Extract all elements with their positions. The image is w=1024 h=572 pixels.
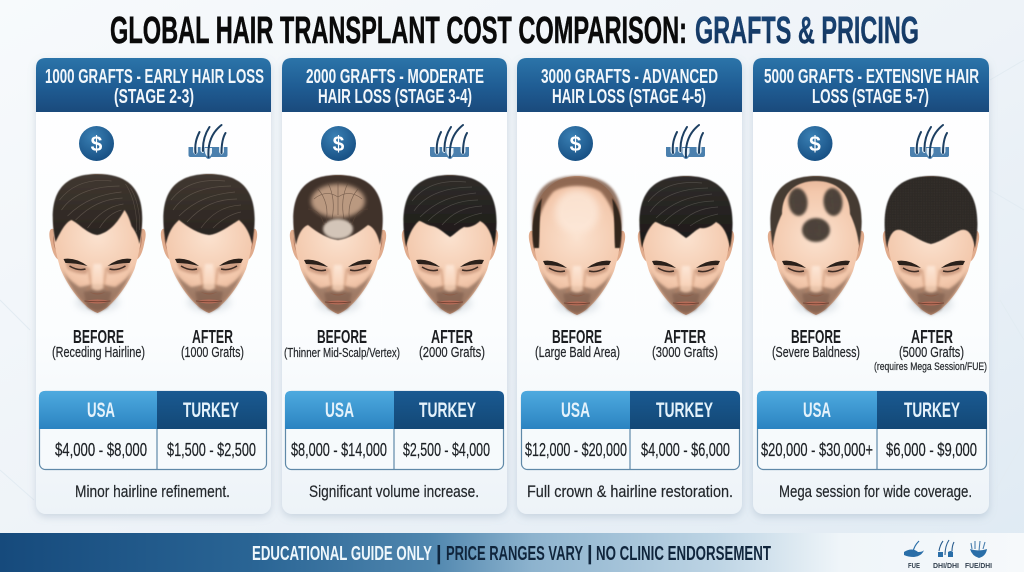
footer disclaimer: | <box>436 543 442 565</box>
after label: (requires Mega Session/FUE) <box>874 361 987 373</box>
icon: dollar <box>79 126 114 161</box>
before label: (Thinner Mid-Scalp/Vertex) <box>284 345 400 360</box>
after label <box>419 326 485 361</box>
panel: 3000 grafts <box>517 58 742 514</box>
price table: $1,500 - $2,500 <box>167 440 256 460</box>
after label <box>874 326 987 373</box>
illustration: before head, severe baldness <box>768 176 864 315</box>
before label <box>772 326 860 361</box>
card background <box>753 58 989 514</box>
icon: hair follicle <box>430 125 469 159</box>
after label: AFTER <box>664 326 706 347</box>
price table <box>757 391 987 470</box>
panel: 1000 grafts <box>36 58 271 514</box>
illustration: before head, receding hairline <box>49 174 146 313</box>
icon: FUE: FUE <box>908 563 920 570</box>
before label: BEFORE <box>552 326 602 347</box>
footer disclaimer: EDUCATIONAL GUIDE ONLY <box>252 543 432 565</box>
icon: dollar <box>558 126 593 161</box>
card heading: LOSS (STAGE 5-7) <box>812 86 929 108</box>
price table <box>285 391 504 470</box>
panel: 5000 grafts <box>753 58 989 514</box>
price table: $8,000 - $14,000 <box>291 440 387 460</box>
legend: technique icons <box>904 540 992 570</box>
footer disclaimer <box>252 543 771 565</box>
price table: USA <box>803 399 831 422</box>
after label: (1000 Grafts) <box>181 344 244 361</box>
card heading: (STAGE 2-3) <box>114 86 194 108</box>
icon: dollar <box>798 126 832 161</box>
price table: $6,000 - $9,000 <box>886 440 977 460</box>
card background <box>36 58 271 514</box>
icon: dollar <box>321 126 356 161</box>
card background <box>517 58 742 514</box>
icon: DHI/DHI: DHI/DHI <box>933 563 959 570</box>
price table: TURKEY <box>904 399 960 422</box>
illustration: after head <box>161 174 257 313</box>
after label: AFTER <box>192 326 233 347</box>
card heading: HAIR LOSS (STAGE 4-5) <box>552 86 706 108</box>
footer disclaimer: PRICE RANGES VARY <box>446 543 583 565</box>
before label <box>52 326 145 361</box>
after label: (5000 Grafts) <box>899 344 964 361</box>
before label: (Receding Hairline) <box>52 344 145 361</box>
card heading: 2000 GRAFTS - MODERATE <box>306 66 484 88</box>
before label: (Large Bald Area) <box>535 344 620 361</box>
before label: BEFORE <box>73 326 124 347</box>
illustration: after head, buzz cut <box>883 176 979 315</box>
icon: hair follicle <box>188 125 228 159</box>
price table <box>39 391 267 470</box>
after label: AFTER <box>431 326 473 347</box>
card heading: 1000 GRAFTS - EARLY HAIR LOSS <box>45 66 264 88</box>
title: GLOBAL HAIR TRANSPLANT COST COMPARISON: <box>110 10 687 52</box>
price table: $4,000 - $6,000 <box>641 440 730 460</box>
note: Full crown & hairline restoration. <box>527 482 733 501</box>
illustration: before head, large bald area <box>529 176 625 315</box>
before label <box>535 326 620 361</box>
panel: 2000 grafts <box>282 58 507 514</box>
icon: FUE/DHI: FUE/DHI <box>965 563 992 570</box>
after label: AFTER <box>911 326 953 347</box>
price table: USA <box>87 399 115 422</box>
after label: (3000 Grafts) <box>652 344 718 361</box>
price table: $20,000 - $30,000+ <box>761 440 873 460</box>
after label <box>181 326 244 361</box>
card heading: 3000 GRAFTS - ADVANCED <box>541 66 718 88</box>
illustration: before head, thinning crown <box>290 175 386 314</box>
after label <box>652 326 718 361</box>
before label: (Severe Baldness) <box>772 344 860 361</box>
note: Significant volume increase. <box>309 482 479 501</box>
card heading <box>517 58 742 112</box>
card heading <box>36 58 271 112</box>
icon: hair follicle <box>666 125 705 159</box>
before label <box>284 326 400 360</box>
icon: dollar: $ <box>91 133 103 156</box>
icon: dollar: $ <box>809 133 821 156</box>
icon: dollar: $ <box>570 133 582 156</box>
card heading <box>753 58 989 112</box>
card heading <box>282 58 507 112</box>
price table: TURKEY <box>183 399 239 422</box>
before label: BEFORE <box>317 326 367 347</box>
price table: USA <box>561 399 590 422</box>
footer bar <box>0 533 1024 572</box>
card background <box>282 58 507 514</box>
footer disclaimer: | <box>587 543 593 565</box>
footer disclaimer: NO CLINIC ENDORSEMENT <box>596 543 771 565</box>
note: Minor hairline refinement. <box>75 482 230 501</box>
price table: $12,000 - $20,000 <box>525 440 627 460</box>
illustration: after head <box>638 176 734 315</box>
before label: BEFORE <box>791 326 841 347</box>
icon: hair follicle <box>910 125 949 159</box>
after label: (2000 Grafts) <box>419 344 485 361</box>
icon: dollar: $ <box>333 133 345 156</box>
price table <box>521 391 740 470</box>
price table: $4,000 - $8,000 <box>55 440 147 460</box>
price table: TURKEY <box>656 399 713 422</box>
card heading: HAIR LOSS (STAGE 3-4) <box>318 86 472 108</box>
illustration: after head <box>402 175 498 314</box>
price table: TURKEY <box>419 399 476 422</box>
price table: $2,500 - $4,000 <box>403 440 490 460</box>
price table: USA <box>325 399 354 422</box>
note: Mega session for wide coverage. <box>779 482 972 501</box>
